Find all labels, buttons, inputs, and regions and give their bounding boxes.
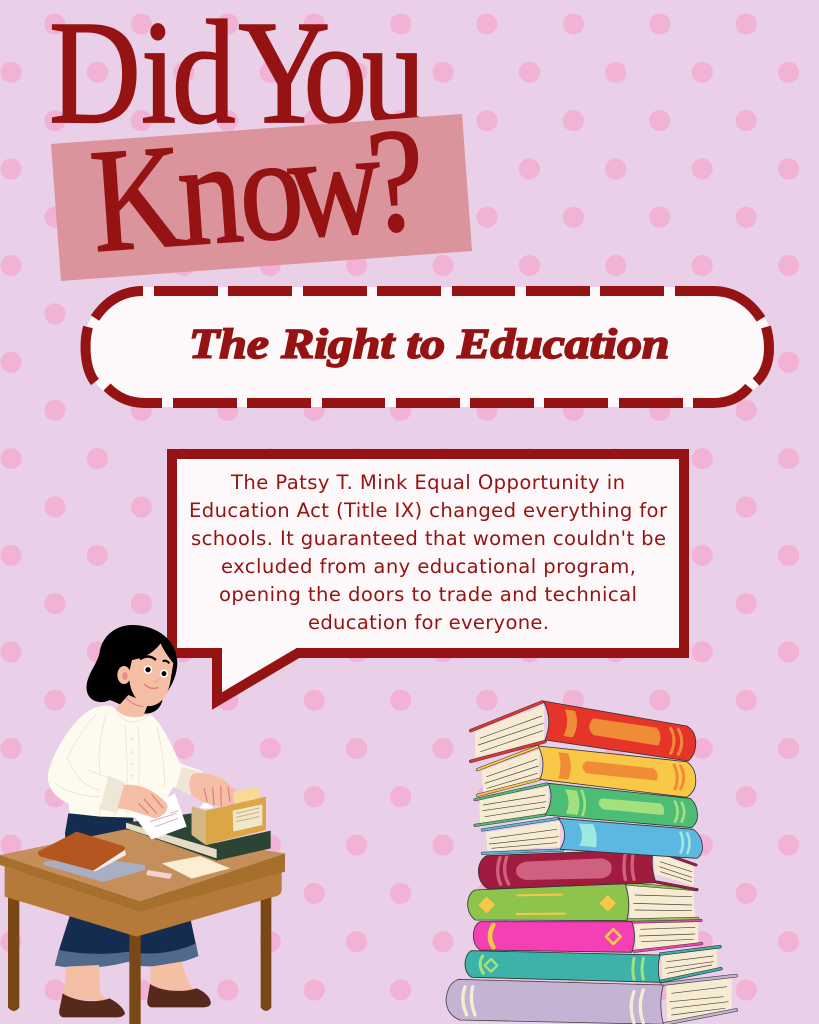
- body text: schools. It guaranteed that women couldn't be: [191, 527, 666, 550]
- shoes: [59, 984, 211, 1017]
- sweater: [48, 706, 203, 818]
- heading: The Right to Education: The Right to Education: [189, 321, 669, 367]
- finger lines: [138, 786, 230, 813]
- illustration: stacked books: [446, 701, 736, 1024]
- ruler strip: [126, 823, 217, 858]
- panel: speech bubble: [172, 454, 684, 701]
- desk top: [0, 829, 285, 902]
- sweater cuffs: [100, 767, 203, 813]
- book: maroon: [478, 849, 697, 890]
- facial features: [126, 656, 169, 707]
- book: red: [471, 701, 696, 761]
- desk: [0, 829, 285, 1024]
- note paper on desk: [162, 856, 230, 879]
- eraser: [146, 870, 172, 879]
- book: lavender: [446, 976, 736, 1024]
- sweater ribbing: [55, 708, 165, 817]
- book: green: [475, 783, 697, 828]
- neck: [113, 695, 148, 720]
- book: yellow: [477, 746, 696, 797]
- book: teal: [465, 947, 721, 982]
- title tag: Know?: Know?: [86, 96, 430, 283]
- hands: [117, 773, 233, 818]
- trousers: [55, 813, 198, 968]
- illustration: woman at desk: [0, 625, 285, 1024]
- desk legs: [8, 893, 271, 1024]
- panel: dashed pill heading: [86, 291, 769, 403]
- paper card in hand: [133, 793, 187, 839]
- legs: [63, 962, 197, 1002]
- file box: [192, 787, 266, 845]
- sweater buttons: [131, 738, 133, 777]
- desk apron: [5, 867, 282, 937]
- book: pink: [473, 920, 702, 952]
- ear: [117, 666, 131, 684]
- face: [129, 643, 173, 706]
- book: lime green: [468, 883, 698, 921]
- body text: excluded from any educational program,: [221, 555, 636, 578]
- desk edge: [0, 853, 285, 912]
- body text: opening the doors to trade and technical: [219, 583, 637, 606]
- trouser cuffs: [55, 943, 198, 968]
- stack of books on desk: [38, 832, 145, 882]
- body text: Education Act (Title IX) changed everything for: [189, 499, 668, 522]
- body text: education for everyone.: [308, 611, 549, 634]
- body text: [189, 471, 668, 634]
- body text: The Patsy T. Mink Equal Opportunity in: [230, 471, 625, 494]
- book: blue: [482, 818, 702, 858]
- hair back: [87, 625, 177, 714]
- card box base folder: [126, 813, 271, 861]
